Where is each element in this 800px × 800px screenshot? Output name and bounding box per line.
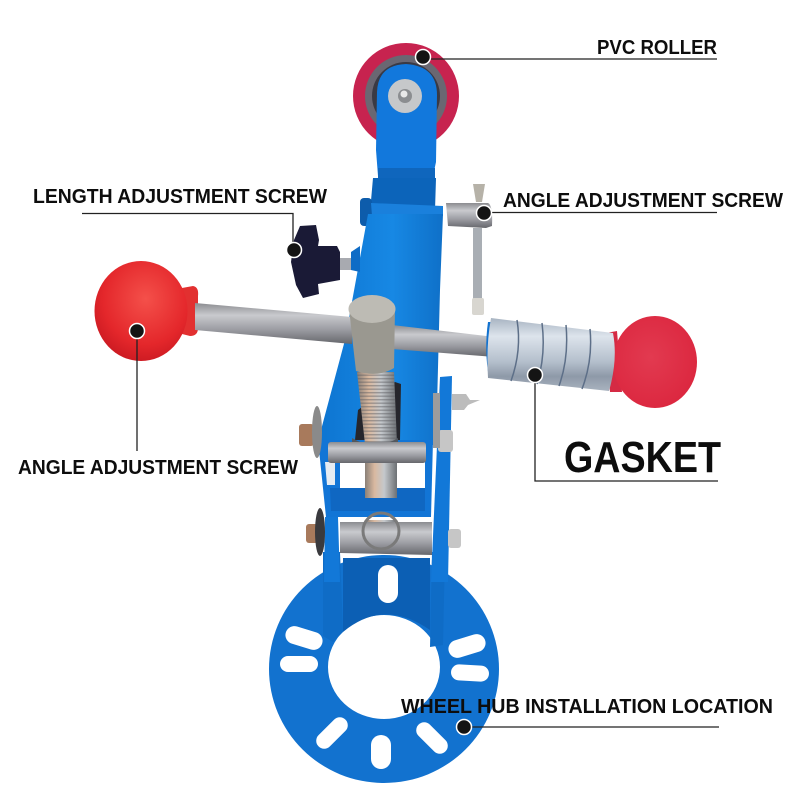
threaded adjuster screw — [348, 295, 401, 546]
length adjustment knob — [291, 225, 360, 298]
callout: angle adjustment screw, right: ANGLE ADJUSTMENT SCREW — [503, 190, 783, 212]
callout: wheel hub installation location: WHEEL HUB INSTALLATION LOCATION — [401, 696, 773, 718]
callout: length adjustment screw: LENGTH ADJUSTMENT SCREW — [33, 186, 327, 208]
callout: length adjustment screw — [33, 186, 327, 258]
bolts and washers — [299, 393, 480, 556]
upper and lower cross rods — [328, 442, 432, 555]
angle adjustment clamp and T screw — [446, 184, 492, 315]
callout: angle adjustment screw, right — [476, 190, 783, 220]
side plates — [324, 376, 452, 582]
callout: PVC roller: PVC ROLLER — [597, 37, 718, 59]
callout: angle adjustment screw, left: ANGLE ADJUSTMENT SCREW — [18, 457, 298, 479]
blue roller arm — [376, 64, 437, 182]
cross handle with red balls — [94, 261, 697, 408]
callout: angle adjustment screw, left — [18, 324, 298, 479]
PVC roller wheel — [353, 43, 459, 149]
main blue body — [317, 178, 443, 445]
gasket stack — [486, 318, 615, 391]
callout: gasket: GASKET — [564, 433, 721, 482]
callout: wheel hub installation location — [401, 696, 773, 734]
front U bracket — [318, 440, 433, 517]
wheel hub mounting disc — [269, 552, 499, 783]
callout: PVC roller — [416, 37, 718, 64]
callout: gasket — [528, 368, 721, 482]
